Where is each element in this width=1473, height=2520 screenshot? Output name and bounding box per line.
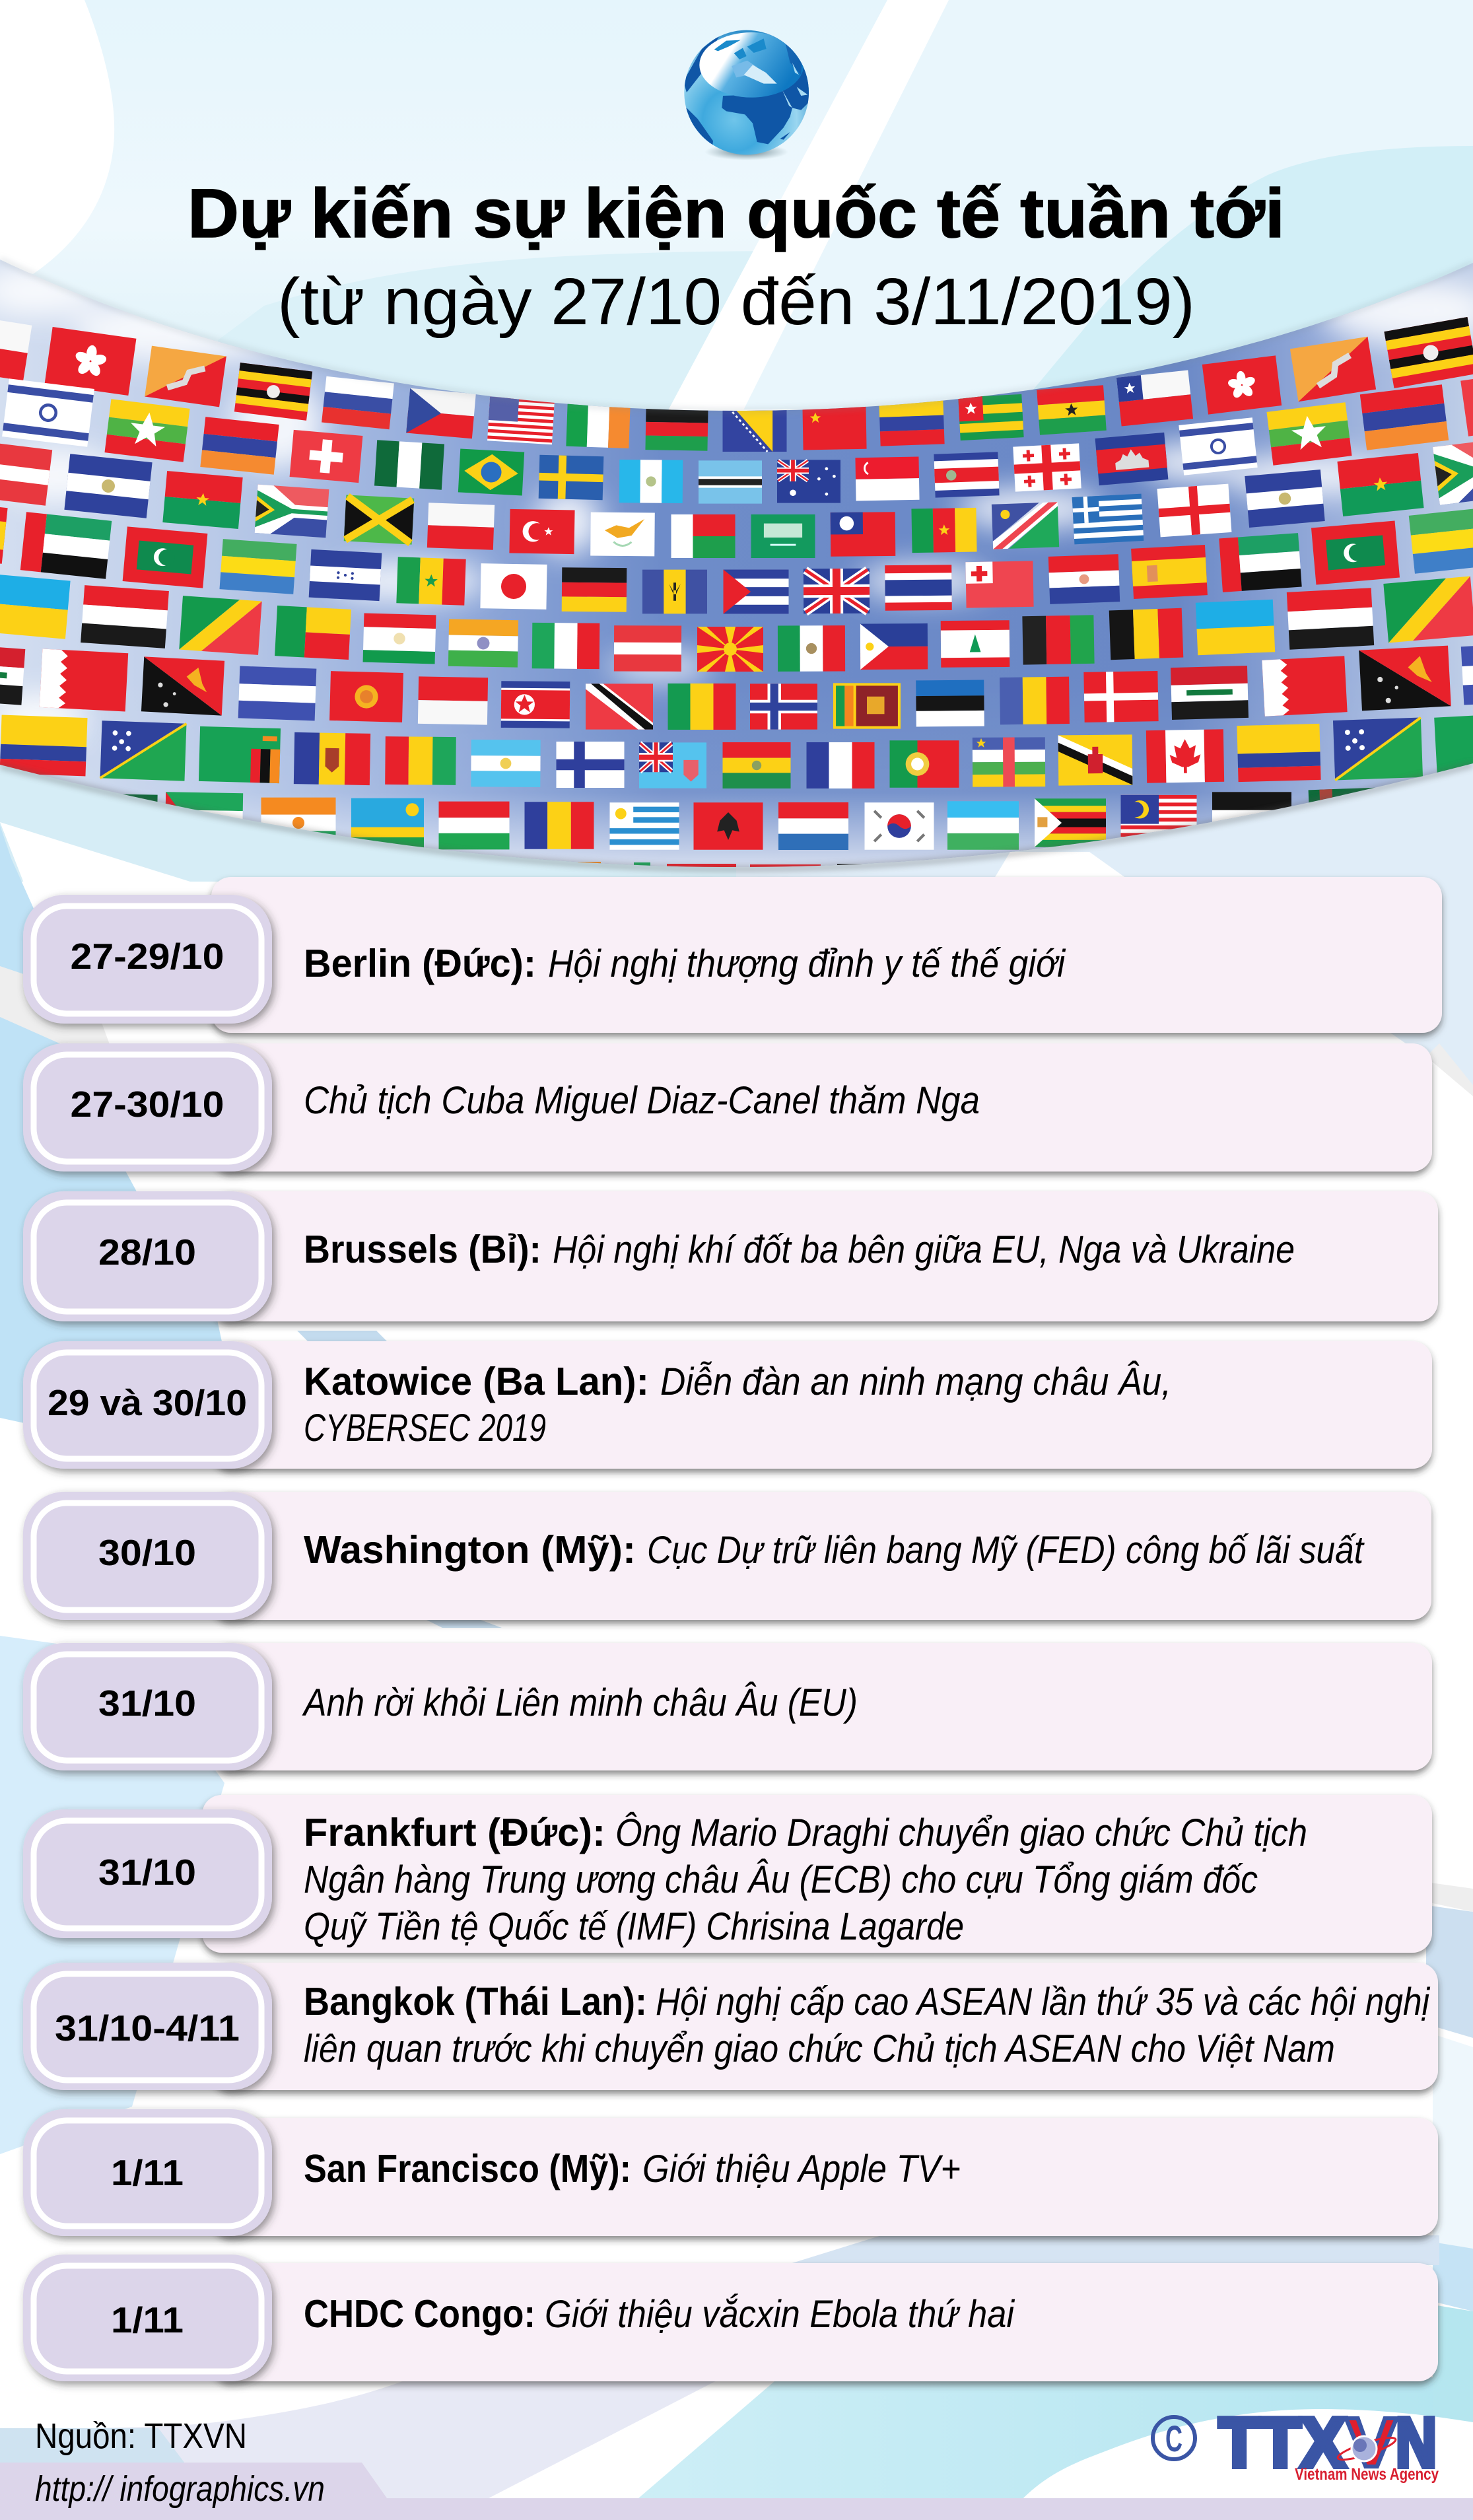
date pill: 27-29/10 [70,936,224,977]
event text [304,942,1066,985]
lower background shapes [0,759,736,882]
event text: Giới thiệu Apple TV+ [642,2148,961,2190]
date pill: 31/10 [98,1683,196,1724]
panel: event 9 [23,2109,1438,2236]
flags row 4 [0,499,1473,614]
flags row 1 [0,312,1473,452]
website: http:// infographics.vn [35,2469,325,2509]
event text: Hội nghị khí đốt ba bên giữa EU, Nga và Ukraine [553,1228,1295,1271]
panel: event 8 [23,1963,1438,2090]
date pill: 27-30/10 [70,1084,224,1125]
date pill [23,895,272,1024]
date pill [23,1963,272,2090]
land: Africa and Asia [722,33,817,144]
icon: small globe [1336,2433,1398,2464]
event text [304,2292,1015,2336]
date pill: 1/11 [111,2152,184,2193]
panel: event 4 [23,1341,1432,1469]
date pill: 31/10 [98,1852,196,1893]
flags row 3 [0,437,1473,558]
date pill [23,1341,272,1469]
event text: Katowice (Ba Lan): [304,1360,649,1403]
flags row 7 [0,713,1473,788]
highlight [699,32,804,98]
flag banner [0,251,1473,872]
event text: Anh rời khỏi Liên minh châu Âu (EU) [302,1681,858,1724]
date pill [23,1643,272,1770]
event text [304,2147,961,2190]
panel: event 5 [23,1492,1431,1620]
event text: Hội nghị thượng đỉnh y tế thế giới [548,942,1066,985]
panel: event 10 [23,2255,1438,2381]
date pill [23,1809,272,1938]
event text: liên quan trước khi chuyển giao chức Chủ tịch ASEAN cho Việt Nam [304,2027,1335,2070]
icon: copyright: C [1165,2418,1182,2459]
panel: event 2 [23,1043,1432,1172]
event text: Frankfurt (Đức): [304,1811,605,1854]
event text [304,1360,1171,1450]
date pill [23,2255,272,2381]
event text: Washington (Mỹ): [304,1528,636,1572]
event text: San Francisco (Mỹ): [304,2147,631,2190]
icon: globe [684,30,809,160]
logo: TTXVN: V [1346,2404,1397,2482]
logo: TTXVN: Vietnam News Agency [1295,2465,1439,2484]
date pill: 31/10-4/11 [55,2008,240,2048]
event text: Bangkok (Thái Lan): [304,1980,647,2023]
flags row 5 [0,573,1473,672]
subtitle: (từ ngày 27/10 đến 3/11/2019) [277,265,1195,339]
date pill [23,2109,272,2236]
icon: copyright [1153,2417,1195,2459]
source line: Nguồn: TTXVN [35,2416,247,2456]
event text: Cục Dự trữ liên bang Mỹ (FED) công bố lãi suất [647,1529,1365,1572]
panel: event 3 [23,1191,1438,1321]
event text [304,1811,1307,1948]
panel: event 6 [23,1643,1432,1770]
event text: Diễn đàn an ninh mạng châu Âu, [660,1360,1171,1403]
event text: Chủ tịch Cuba Miguel Diaz-Canel thăm Nga [304,1079,980,1122]
date pill [23,1191,272,1321]
event text: Giới thiệu vắcxin Ebola thứ hai [545,2293,1015,2336]
event text [304,1228,1295,1271]
flags row 6 [0,642,1473,730]
date pill: 28/10 [98,1232,196,1273]
flags row 2 [2,369,1473,504]
flags row 9 peek [578,862,862,867]
date pill: 30/10 [98,1532,196,1573]
panel: event 1 [23,877,1442,1033]
date pill: 29 và 30/10 [48,1382,247,1423]
event text: Ông Mario Draghi chuyển giao chức Chủ tịch [615,1811,1307,1854]
title: Dự kiến sự kiện quốc tế tuần tới [188,175,1285,252]
panel: event 7 [23,1795,1432,1953]
event text [304,1980,1431,2070]
event text: CHDC Congo: [304,2292,535,2336]
event text [304,1528,1365,1572]
logo: TTXVN: N [1396,2404,1437,2482]
banner edge shadows [0,260,1473,869]
date pill [23,1492,272,1620]
footer band [0,2463,1473,2520]
date pill: 1/11 [111,2299,184,2340]
event text: CYBERSEC 2019 [304,1407,546,1450]
event text: Brussels (Bỉ): [304,1228,541,1271]
event text: Quỹ Tiền tệ Quốc tế (IMF) Chrisina Lagarde [304,1905,964,1948]
event text: Berlin (Đức): [304,942,536,985]
logo: TTXVN: TTX [1219,2404,1346,2482]
flags row 8 [84,787,1389,850]
logo: TTXVN [1153,2404,1439,2484]
date pill [23,1043,272,1172]
event text: Ngân hàng Trung ương châu Âu (ECB) cho cựu Tổng giám đốc [304,1858,1258,1901]
